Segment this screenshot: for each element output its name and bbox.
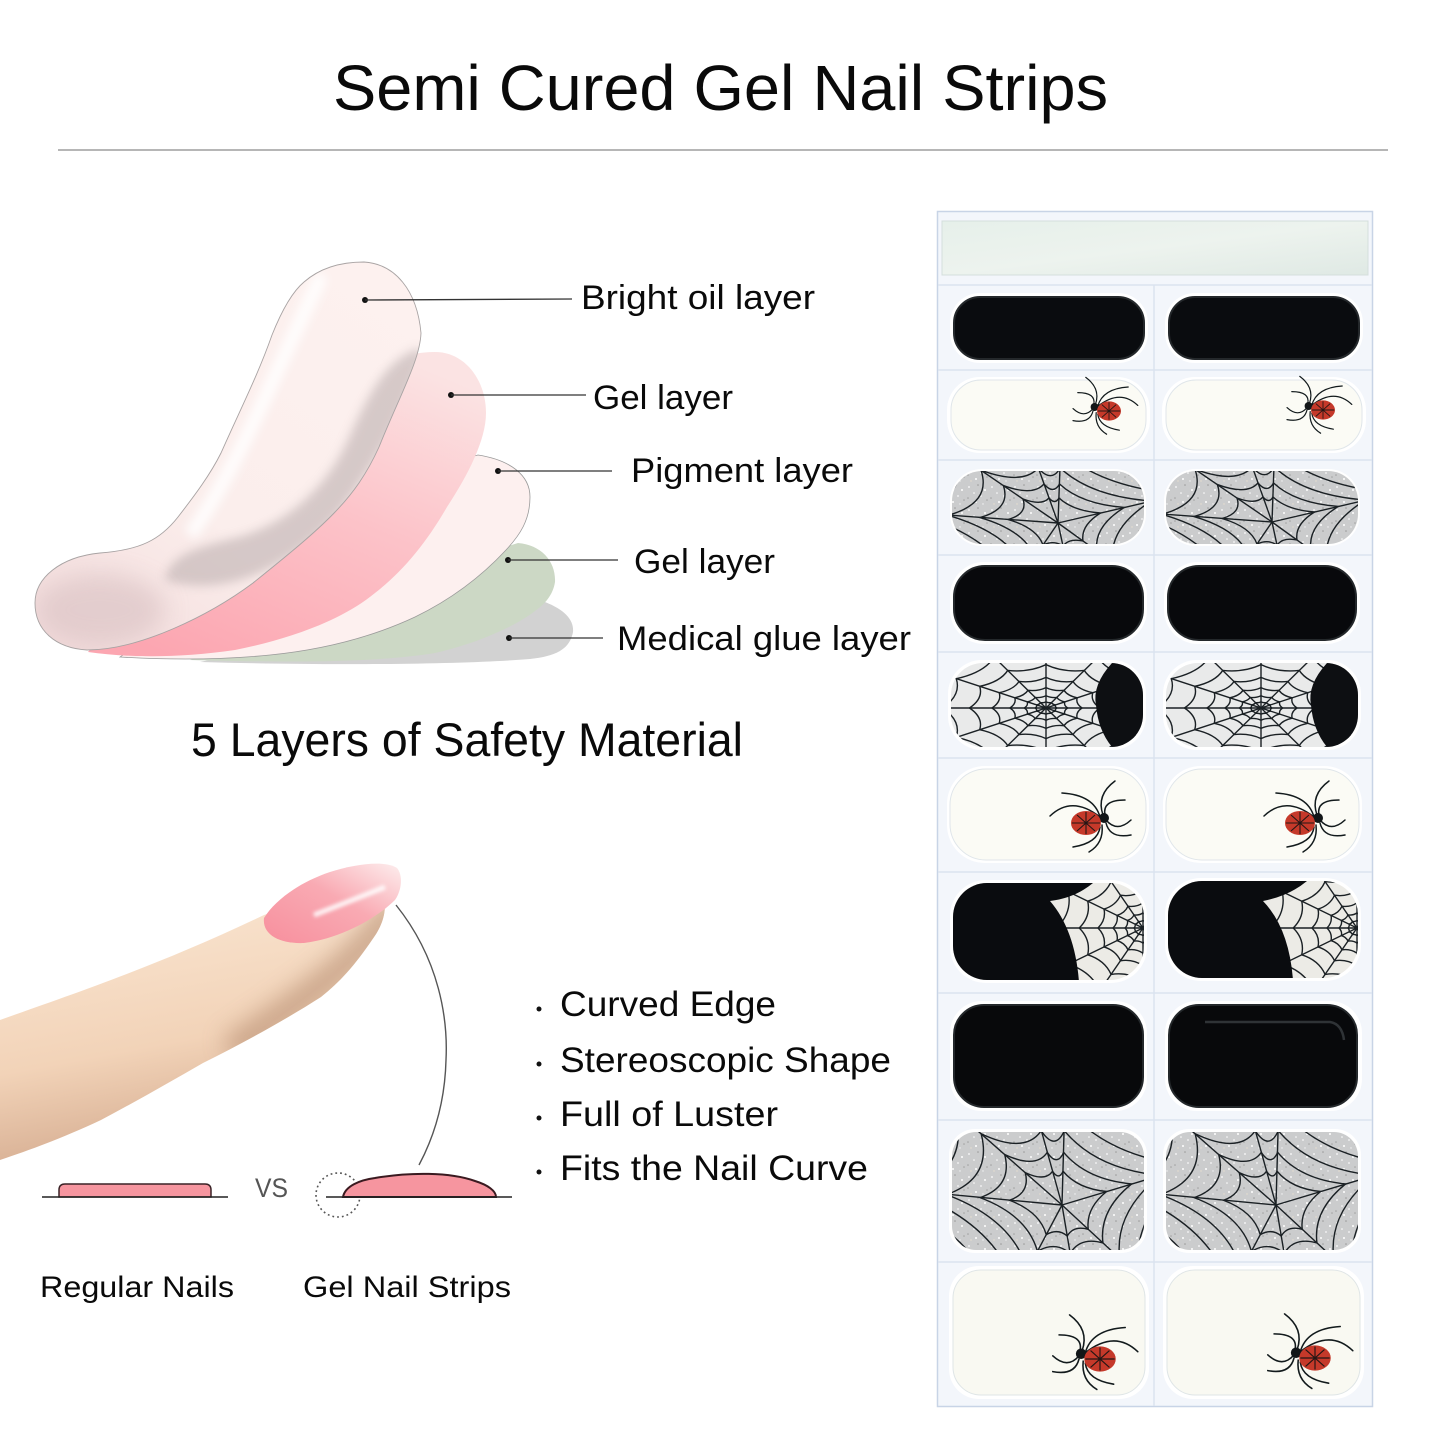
row 5: web nails with black tip	[948, 660, 1361, 750]
heading: layers caption: 5 Layers of Safety Material	[191, 713, 743, 766]
layer: medical glue (gray)	[200, 602, 573, 664]
text block: feature list: Full of Luster	[560, 1095, 778, 1134]
leader: gel layer lower	[505, 543, 775, 581]
text block: feature list: Fits the Nail Curve	[560, 1149, 868, 1188]
row 2: white nails with spider	[947, 376, 1366, 453]
row 9: glitter web nails	[949, 1129, 1361, 1253]
leader: gel layer: Gel layer	[593, 379, 733, 417]
row 10: white nails with spider	[949, 1266, 1364, 1399]
sheet backing	[938, 212, 1372, 1406]
row 7: black nails with corner web	[950, 878, 1361, 983]
layer: bright oil	[35, 262, 425, 650]
label: gel nail strips: Gel Nail Strips	[303, 1271, 511, 1304]
title: Semi Cured Gel Nail Strips	[333, 52, 1108, 124]
nail highlight	[314, 887, 385, 915]
panel: five layers diagram	[35, 262, 911, 664]
text block: feature list: Curved Edge	[560, 985, 776, 1024]
illustration: finger with nail	[0, 864, 401, 1160]
row 1: black nails	[950, 293, 1363, 363]
finger	[0, 890, 385, 1160]
nail	[264, 864, 401, 943]
row 3: glitter web nails	[950, 469, 1360, 546]
row 8: black nails	[950, 1001, 1362, 1111]
label: VS: VS	[255, 1173, 288, 1203]
text block: feature list: Stereoscopic Shape	[560, 1041, 891, 1080]
leader: gel layer	[448, 379, 733, 417]
panel: nail strip sheet	[936, 210, 1374, 1408]
label: regular nails: Regular Nails	[40, 1271, 234, 1304]
layer: gel (pink)	[88, 352, 486, 656]
row 6: white nails with spider	[947, 766, 1362, 863]
arrow: nail to cross-section	[396, 905, 446, 1165]
leader: gel layer lower: Gel layer	[634, 543, 775, 581]
row 4: black nails	[950, 562, 1360, 644]
layer: gel (green)	[190, 543, 555, 662]
leader: bright oil layer	[362, 279, 815, 317]
fingertip shading	[230, 905, 395, 1050]
leader: pigment layer	[495, 452, 853, 490]
leader: medical glue layer	[506, 620, 911, 658]
diagram: regular nail cross-section	[42, 1184, 228, 1197]
top tab	[942, 221, 1368, 275]
leader: pigment layer: Pigment layer	[631, 452, 853, 490]
diagram: gel strip cross-section	[316, 1173, 512, 1217]
leader: medical glue layer: Medical glue layer	[617, 620, 911, 658]
layer: pigment	[120, 455, 530, 659]
leader: bright oil layer: Bright oil layer	[581, 279, 815, 317]
text block: feature list	[536, 985, 891, 1188]
